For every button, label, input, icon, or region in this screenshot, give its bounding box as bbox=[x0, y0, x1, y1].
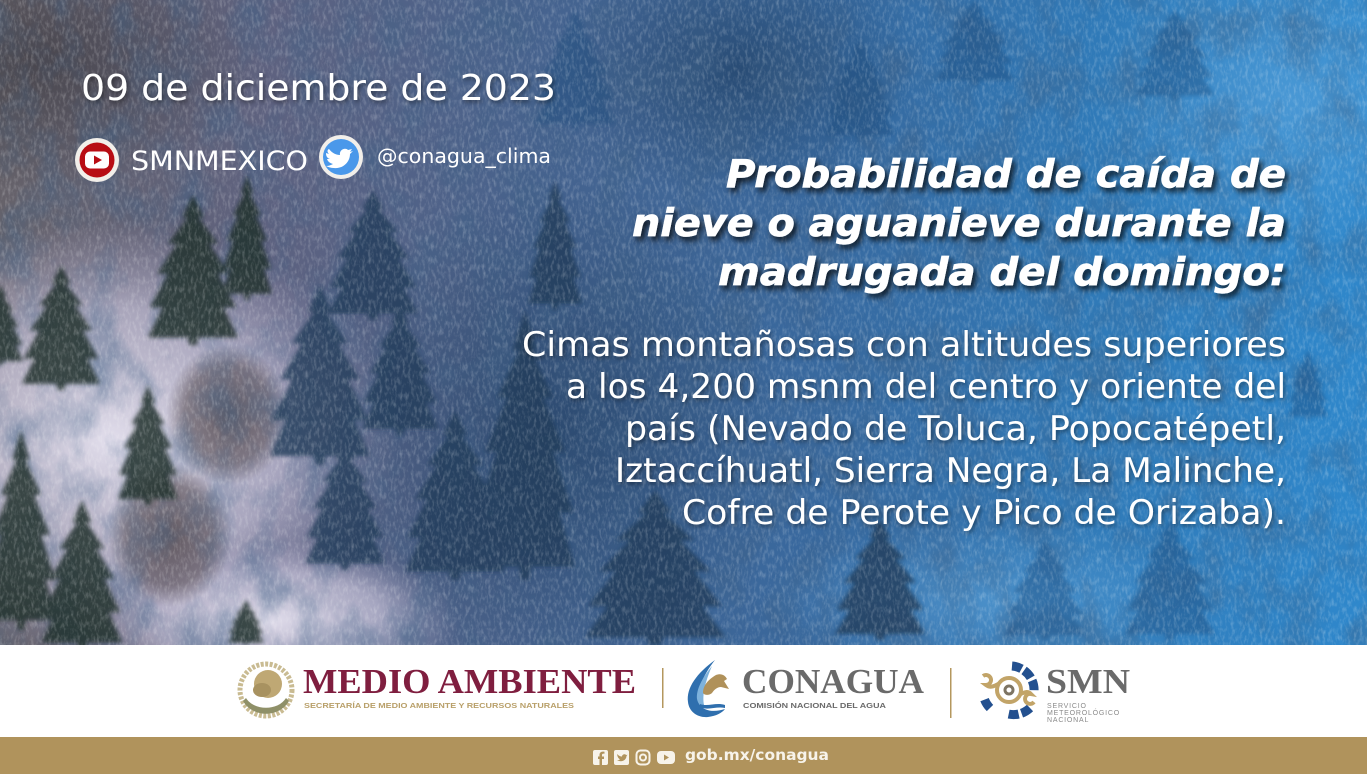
logo: Conagua bbox=[688, 660, 925, 717]
body text: a los 4,200 msnm del centro y oriente del bbox=[566, 367, 1286, 407]
body text: país (Nevado de Toluca, Popocatépetl, bbox=[625, 409, 1286, 449]
body text: Iztaccíhuatl, Sierra Negra, La Malinche, bbox=[615, 451, 1286, 491]
icon: twitter bbox=[614, 750, 629, 765]
logo: SMN: NACIONAL bbox=[1047, 717, 1089, 724]
title: madrugada del domingo: bbox=[718, 250, 1286, 294]
logo: Conagua: COMISIÓN NACIONAL DEL AGUA bbox=[743, 701, 887, 710]
logo: SMN bbox=[983, 662, 1130, 724]
logo: SMN: SMN bbox=[1046, 662, 1130, 701]
youtube handle: SMNMEXICO bbox=[131, 146, 308, 177]
logo band bbox=[0, 645, 1367, 737]
logo: Medio Ambiente: SECRETARÍA DE MEDIO AMBIENTE Y RECURSOS NATURALES bbox=[304, 701, 574, 710]
logo: Medio Ambiente: MEDIO AMBIENTE bbox=[303, 662, 636, 701]
body text bbox=[522, 325, 1286, 533]
twitter handle: @conagua_clima bbox=[377, 144, 551, 168]
body text: Cofre de Perote y Pico de Orizaba). bbox=[682, 493, 1286, 533]
icon: facebook bbox=[593, 750, 608, 765]
trees: blue-toned conifers centre bbox=[270, 180, 925, 645]
footer bar bbox=[0, 737, 1367, 774]
title bbox=[632, 152, 1286, 294]
body text: Cimas montañosas con altitudes superiores bbox=[522, 325, 1286, 365]
logo: Mexican coat of arms seal bbox=[240, 664, 292, 716]
logo: Conagua: CONAGUA bbox=[742, 662, 925, 701]
icon: twitter bbox=[319, 135, 363, 179]
logo: SMN: METEOROLÓGICO bbox=[1047, 708, 1120, 717]
title: Probabilidad de caída de bbox=[726, 152, 1286, 196]
logo: SMN: SERVICIO bbox=[1047, 703, 1087, 710]
icon: instagram bbox=[636, 750, 650, 764]
trees: distant blue conifers right bbox=[535, 0, 1328, 640]
trees: dark conifers left side bbox=[0, 175, 272, 650]
title: nieve o aguanieve durante la bbox=[632, 201, 1286, 245]
footer url: gob.mx/conagua bbox=[685, 746, 829, 764]
date heading: 09 de diciembre de 2023 bbox=[81, 68, 556, 109]
icon: youtube bbox=[657, 751, 675, 764]
icon: youtube bbox=[75, 138, 119, 182]
